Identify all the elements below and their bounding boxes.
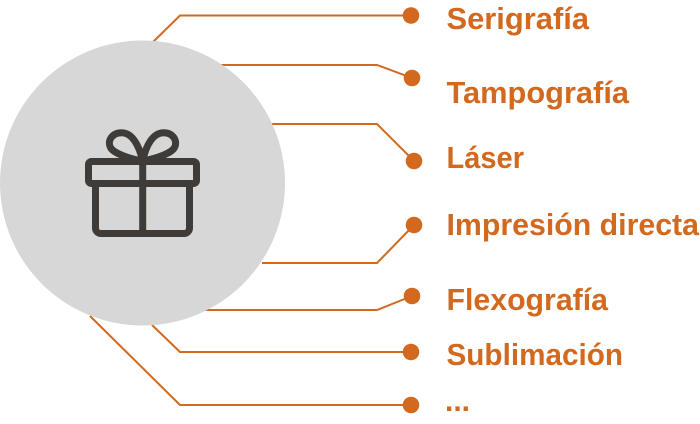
item: Tampografía: Tampografía (446, 75, 630, 110)
item: ellipsis (403, 383, 470, 418)
item: Láser: Láser (446, 140, 524, 175)
connector lines (90, 16, 414, 405)
item: Sublimación: Sublimación (446, 337, 623, 372)
grey circle (0, 40, 285, 326)
item: Flexografía: Flexografía (446, 282, 609, 317)
item: Impresión directa: Impresión directa (446, 207, 700, 242)
icon: gift box (88, 133, 196, 234)
item: Láser (406, 140, 524, 175)
item: Serigrafía: Serigrafía (446, 1, 590, 36)
item: ellipsis: ... (445, 383, 470, 418)
